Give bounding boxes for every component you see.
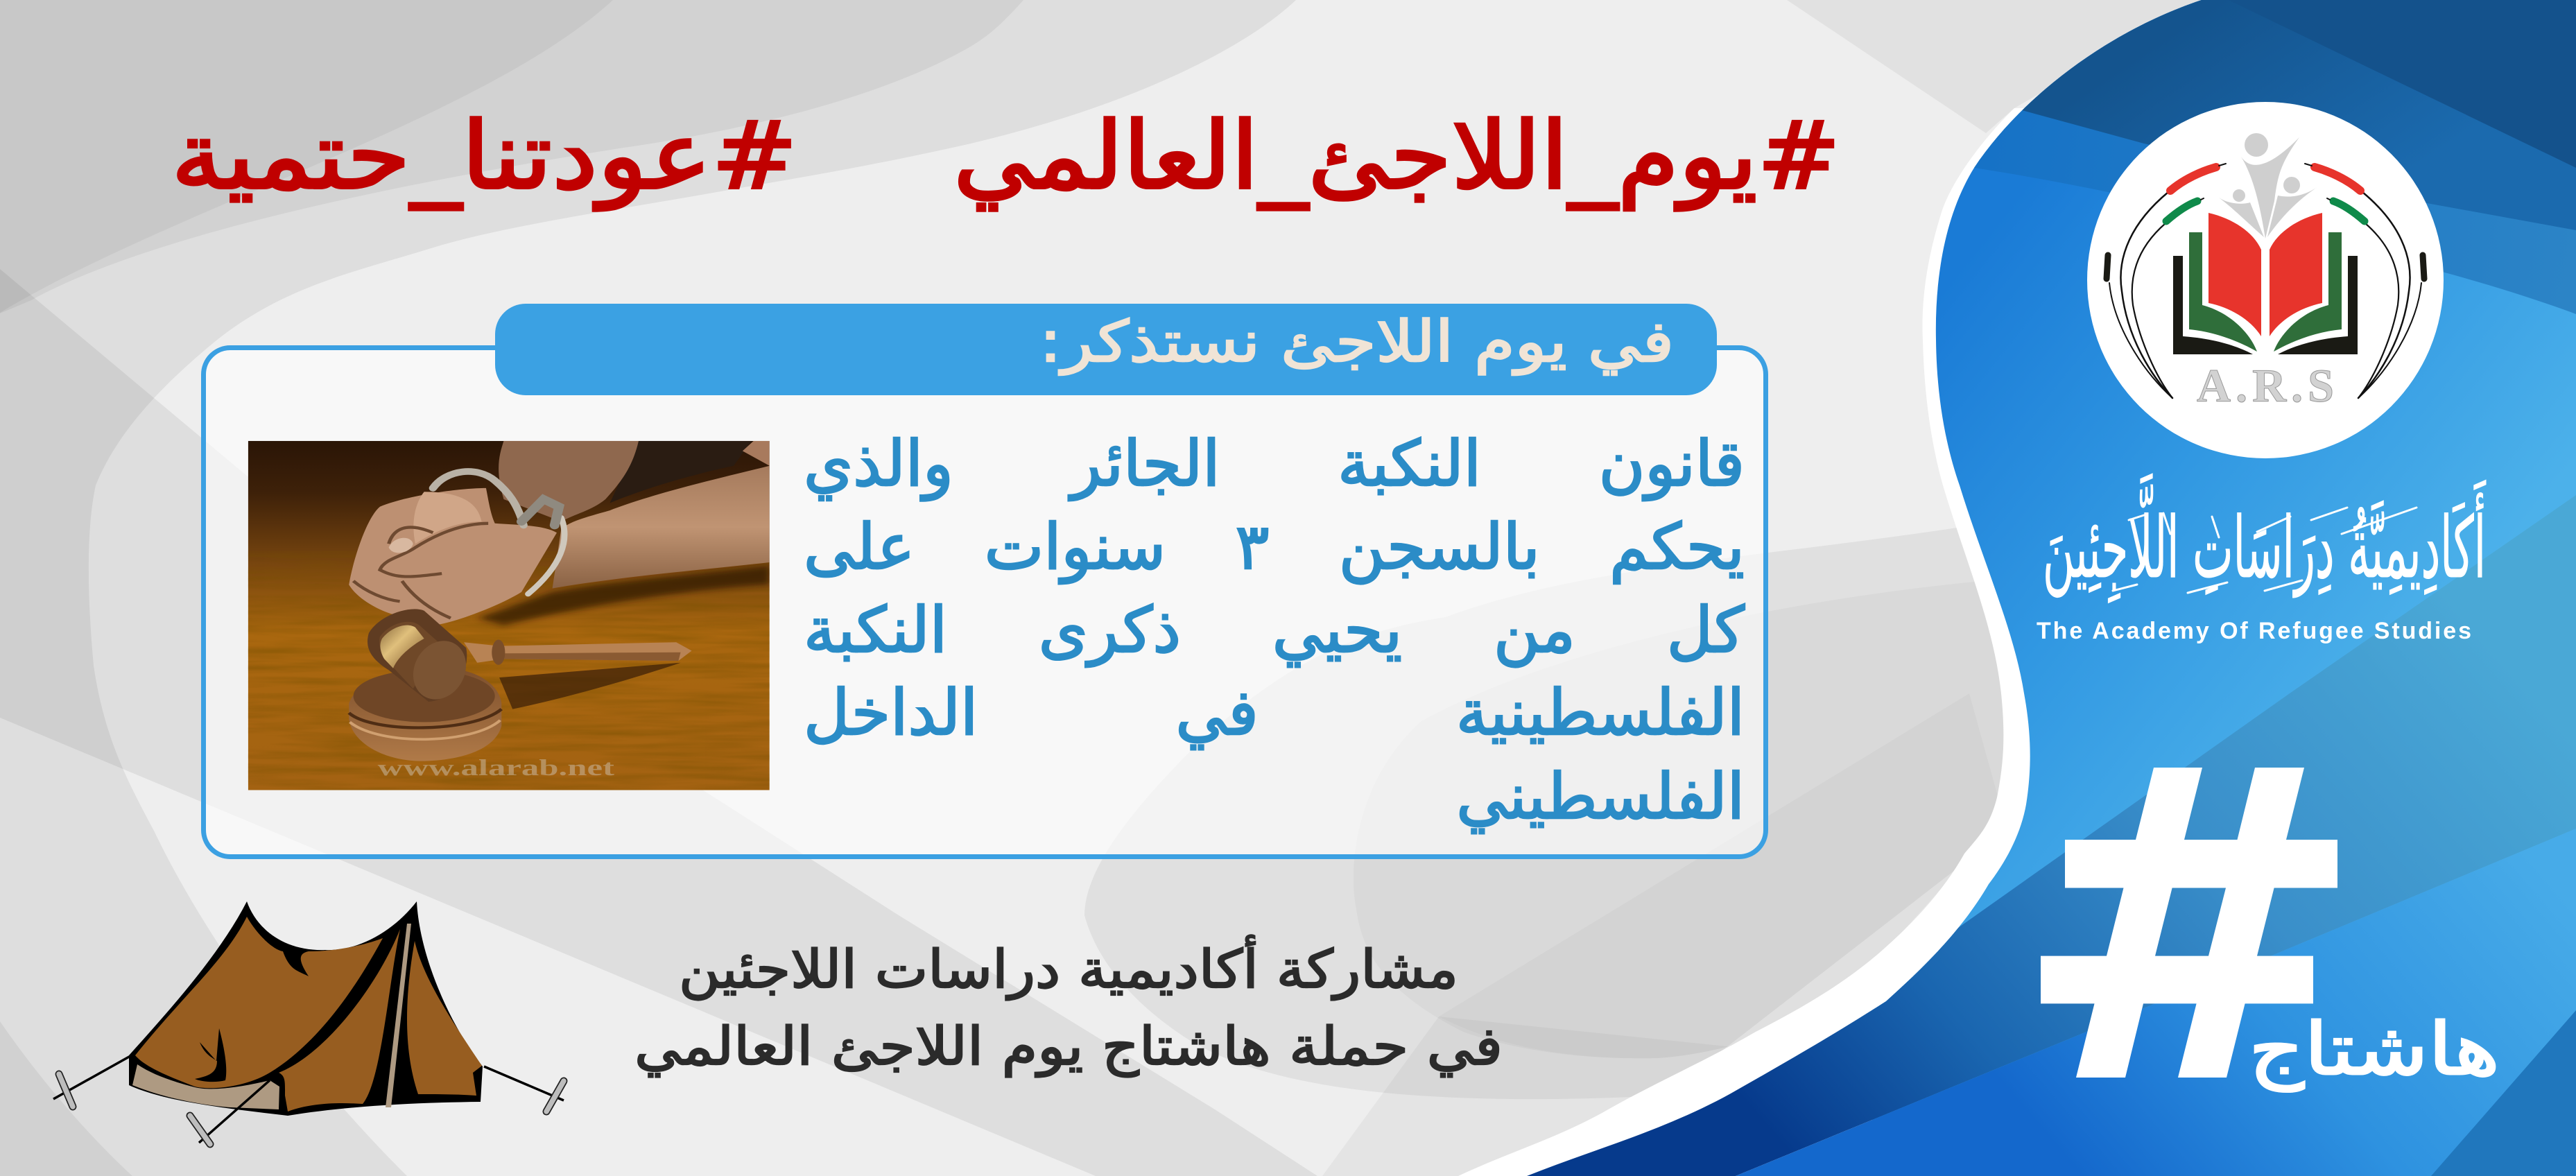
body line 2: يحكم بالسجن ٣ سنوات على	[804, 511, 1745, 584]
gavel block	[349, 668, 501, 761]
body line 5: الفلسطيني	[1456, 761, 1745, 833]
footer line 1: مشاركة أكاديمية دراسات اللاجئين	[679, 935, 1458, 1001]
blue panel	[1491, 0, 2576, 1176]
hands	[349, 488, 557, 625]
wood grain	[248, 551, 770, 790]
logo: reeds left	[2107, 164, 2226, 398]
forearm	[553, 466, 770, 589]
title: world refugee day hashtag: #يوم_اللاجئ_العالمي	[953, 102, 1840, 211]
hashtag word: هاشتاج	[2249, 1007, 2500, 1091]
panel header pill	[495, 304, 1717, 395]
tent pegs	[59, 1074, 564, 1144]
logo: open book, left half	[2173, 213, 2261, 354]
icon: tent	[53, 901, 564, 1144]
gavel head	[368, 609, 467, 702]
shadow under the arms	[477, 566, 770, 625]
logo: human figures	[2219, 133, 2319, 239]
gavel shadow on table	[499, 663, 681, 709]
body line 1: قانون النكبة الجائر والذي	[804, 428, 1745, 501]
logo circle	[2087, 102, 2444, 458]
footer line 2: في حملة هاشتاج يوم اللاجئ العالمي	[634, 1015, 1503, 1078]
academy English name: The Academy Of Refugee Studies	[2037, 618, 2471, 644]
body line 4: الفلسطينية في الداخل	[804, 677, 1745, 750]
academy name calligraphy	[2043, 473, 2486, 603]
logo: open book, right half	[2270, 213, 2358, 354]
gavel handle	[464, 642, 692, 663]
tent ropes	[53, 1056, 564, 1143]
logo: A.R.S lettering: A.R.S	[2197, 359, 2334, 412]
handcuffs	[433, 472, 564, 594]
body text	[804, 428, 1746, 835]
panel: main card	[201, 345, 1768, 859]
photo: handcuffed hands and gavel	[248, 441, 770, 790]
photo watermark: www.alarab.net	[378, 754, 614, 780]
logo: reeds right	[2305, 164, 2424, 398]
white band	[1458, 108, 2080, 1176]
icon: large hash sign	[2041, 768, 2337, 1078]
upper arm	[499, 441, 639, 521]
header pill text: في يوم اللاجئ نستذكر:	[1039, 309, 1674, 375]
body line 3: كل من يحيي ذكرى النكبة	[804, 594, 1745, 667]
title: our return is inevitable hashtag: #عودتنا_حتمية	[171, 102, 797, 211]
